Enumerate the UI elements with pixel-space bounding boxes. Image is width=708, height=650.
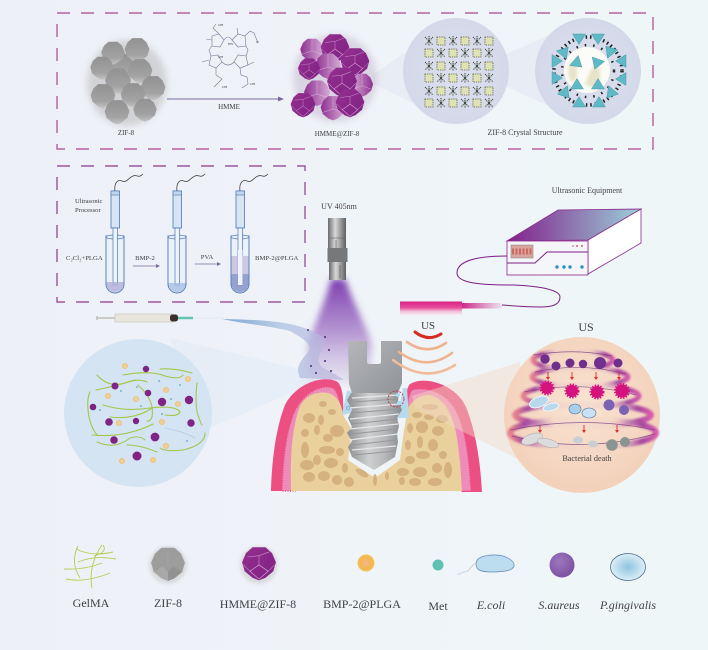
panel: ZIF-8 synthesis xyxy=(57,13,653,149)
label: bacterial death: Bacterial death xyxy=(562,454,612,463)
activated bacteria xyxy=(541,382,628,398)
HMME molecule xyxy=(202,23,259,89)
legend: P. gingivalis: P.gingivalis xyxy=(599,598,656,612)
HMME molecule: OH xyxy=(250,82,256,86)
hydrogel around implant neck xyxy=(342,388,409,418)
panel: hydrogel lens xyxy=(64,339,212,487)
arrow: step 1 xyxy=(133,264,160,268)
HMME molecule: HN xyxy=(228,42,234,46)
gum inner xyxy=(282,387,471,491)
lens cones xyxy=(365,18,588,124)
ultrasonic device xyxy=(507,209,641,275)
syringe xyxy=(97,314,224,322)
HMME molecule: OH xyxy=(222,85,228,89)
label: ultrasonic processor: Processor xyxy=(75,207,101,214)
tube 3 xyxy=(231,174,268,293)
panel: implant and gum xyxy=(271,341,482,492)
HMME@ZIF-8 cluster xyxy=(291,34,377,122)
label: US: US xyxy=(421,320,435,332)
injected hydrogel stream xyxy=(222,319,344,380)
bone xyxy=(291,393,462,491)
BMP-2@PLGA particles xyxy=(106,364,190,464)
UV light beam xyxy=(305,279,372,385)
ultrasonic waves xyxy=(393,332,455,373)
implant xyxy=(347,341,402,470)
Met particles xyxy=(99,380,188,442)
label: US over lens: US xyxy=(578,320,594,334)
legend: BMP-2@PLGA xyxy=(323,554,401,611)
HMME molecule: OH xyxy=(218,23,224,27)
legend: HMME@ZIF-8 xyxy=(220,546,296,611)
red arrows xyxy=(538,372,621,433)
UV lamp xyxy=(328,218,348,280)
legend: GelMA: GelMA xyxy=(73,596,110,610)
tube 1 xyxy=(106,174,143,293)
sonication rings xyxy=(510,351,656,447)
lens: crystal lattice xyxy=(403,18,509,124)
label: product: BMP-2@PLGA xyxy=(255,255,298,262)
label: PVA: PVA xyxy=(201,254,213,261)
legend: GelMA xyxy=(64,545,116,610)
legend: E. coli xyxy=(457,555,514,612)
label: ultrasonic processor: Ultrasonic xyxy=(75,198,102,205)
legend: E. coli: E.coli xyxy=(476,598,505,612)
tube 2 xyxy=(168,174,205,293)
panel: BMP-2@PLGA preparation xyxy=(57,166,305,302)
peach lens cone xyxy=(412,362,530,465)
label: reagents: C₂Cl₂+PLGA xyxy=(66,255,103,262)
bone pores xyxy=(300,401,452,487)
legend: HMME@ZIF-8: HMME@ZIF-8 xyxy=(220,597,296,611)
arrow: HMME loading xyxy=(167,96,284,102)
panel: bacterial death lens xyxy=(504,337,660,493)
label: ultrasonic equipment: Ultrasonic Equipment xyxy=(552,186,623,195)
lens: crystal pore xyxy=(535,18,641,124)
label: ZIF-8: ZIF-8 xyxy=(118,129,135,137)
panel: legend xyxy=(64,545,656,613)
ultrasonic probe xyxy=(400,302,502,316)
label: UV 405nm: UV 405nm xyxy=(321,202,358,211)
legend: BMP-2@PLGA: BMP-2@PLGA xyxy=(323,597,401,611)
gel lens cone xyxy=(170,338,312,430)
arrow: step 2 xyxy=(195,262,221,266)
HMME molecule: O xyxy=(256,40,259,44)
HMME molecule: NH xyxy=(218,55,224,59)
legend: S. aureus xyxy=(538,552,580,612)
legend: S. aureus: S.aureus xyxy=(538,598,580,612)
gum: right xyxy=(406,381,482,492)
biofilm marker xyxy=(346,391,406,410)
label: HMME: HMME xyxy=(218,103,240,111)
label: BMP-2: BMP-2 xyxy=(135,255,155,262)
live bacteria xyxy=(528,394,629,418)
legend: ZIF-8 xyxy=(149,546,187,610)
legend: ZIF-8: ZIF-8 xyxy=(154,596,182,610)
dead bacteria xyxy=(520,431,630,451)
cable xyxy=(457,256,560,307)
ZIF-8 cluster xyxy=(87,38,167,126)
HMME@ZIF-8 particles xyxy=(90,366,195,460)
label: HMME@ZIF-8: HMME@ZIF-8 xyxy=(315,130,360,138)
GelMA fibres xyxy=(88,369,205,452)
gum: left xyxy=(271,379,343,491)
S. aureus row xyxy=(540,354,622,370)
legend: Met xyxy=(428,560,448,613)
legend: Met: Met xyxy=(428,599,448,613)
label: crystal structure: ZIF-8 Crystal Structure xyxy=(487,128,563,137)
legend: P. gingivalis xyxy=(599,554,656,612)
